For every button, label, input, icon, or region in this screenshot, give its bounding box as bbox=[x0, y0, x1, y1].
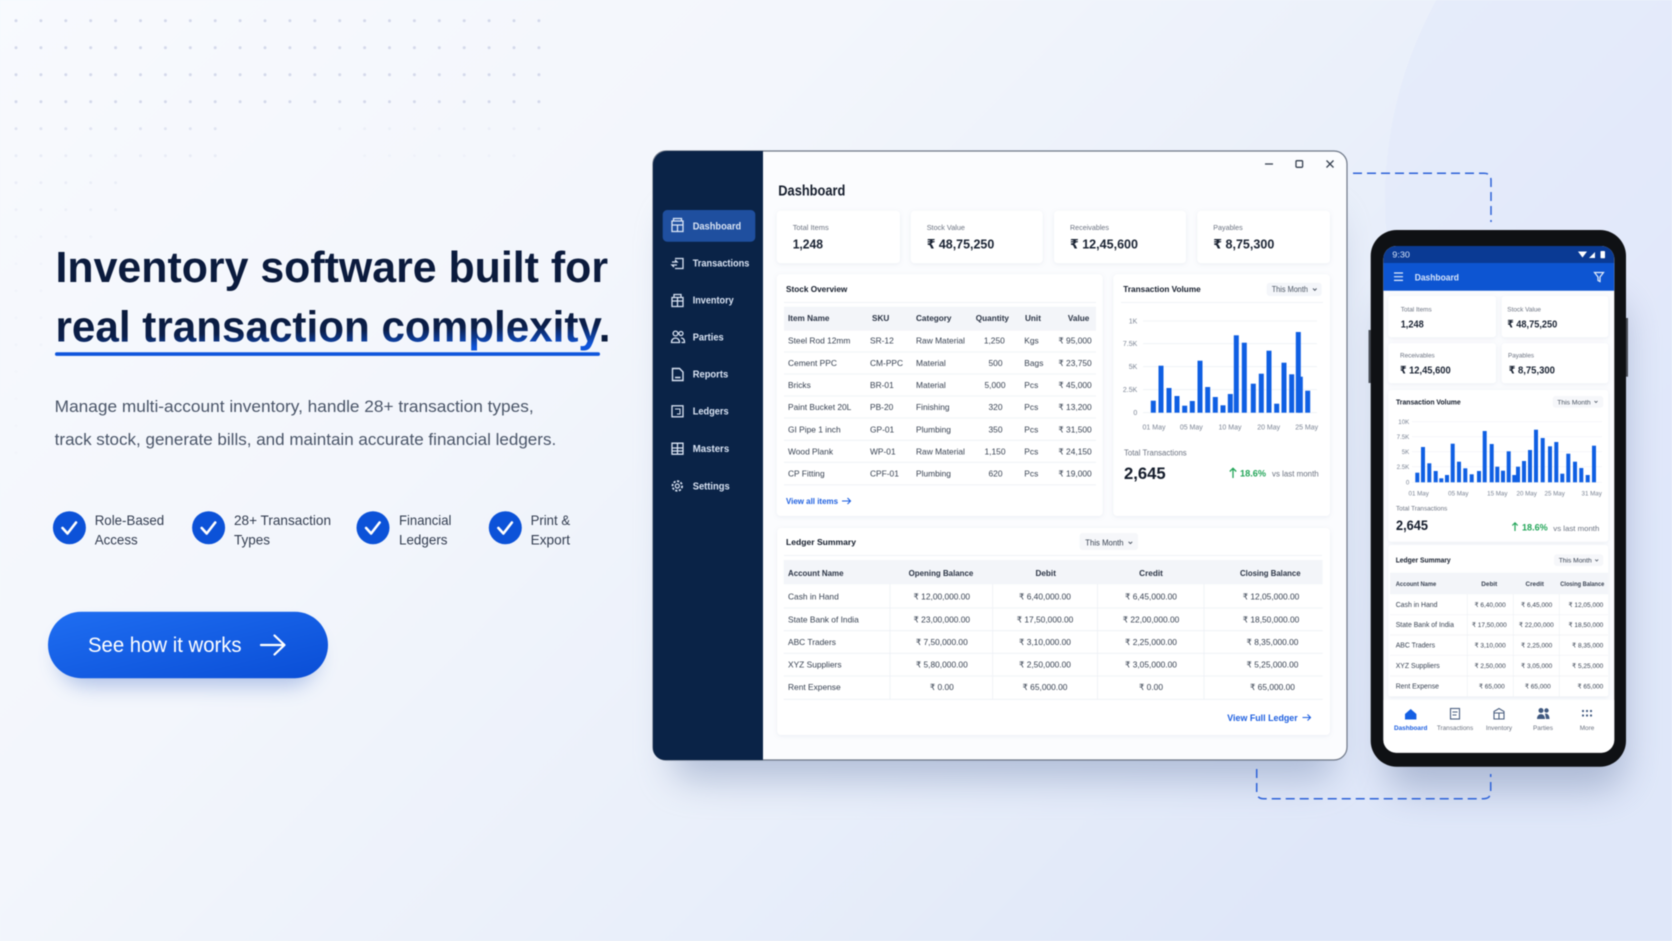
stock table: Pcs bbox=[1024, 446, 1038, 456]
phone ledger table bbox=[1390, 573, 1608, 697]
phone panel: ledger summary: Ledger Summary bbox=[1396, 556, 1451, 565]
dropdown: this month bbox=[1080, 533, 1138, 550]
bar chart: transaction volume: 10 May bbox=[1219, 424, 1242, 431]
stock table: Raw Material bbox=[916, 446, 965, 456]
stock table: Plumbing bbox=[916, 469, 951, 479]
phone ledger table: ₹ 2,25,000 bbox=[1521, 642, 1553, 650]
bar chart: transaction volume: 05 May bbox=[1180, 424, 1203, 431]
bar chart: transaction volume: 5K bbox=[1129, 364, 1138, 371]
phone ledger table: Debit bbox=[1481, 581, 1498, 588]
ledger table: ₹ 7,50,000.00 bbox=[916, 637, 968, 647]
ledger table: Opening Balance bbox=[909, 569, 974, 578]
tab: inventory: Inventory bbox=[1486, 725, 1513, 732]
stock table: ₹ 23,750 bbox=[1058, 358, 1092, 368]
phone status bar bbox=[1383, 246, 1614, 263]
description text: Manage multi-account inventory, handle 28+ transaction types, bbox=[55, 397, 534, 416]
bar chart: transaction volume: 1K bbox=[1129, 318, 1138, 326]
ledger table: ₹ 12,05,000.00 bbox=[1243, 592, 1300, 602]
stock table: ₹ 13,200 bbox=[1058, 402, 1092, 412]
nav item: reports bbox=[672, 368, 729, 381]
phone ledger table: ₹ 65,000 bbox=[1479, 684, 1505, 690]
stock table: 320 bbox=[989, 402, 1003, 412]
nav item: dashboard (active): Dashboard bbox=[693, 221, 741, 232]
bar chart: transaction volume: 0 bbox=[1133, 410, 1137, 417]
tab: transactions bbox=[1437, 708, 1473, 732]
heading: Inventory software built for bbox=[56, 243, 608, 292]
tab: inventory bbox=[1486, 708, 1513, 732]
stock table: ₹ 24,150 bbox=[1058, 446, 1092, 456]
stock table bbox=[784, 307, 1096, 485]
phone ledger table: ₹ 2,50,000 bbox=[1474, 663, 1506, 670]
phone ledger table: Rent Expense bbox=[1396, 684, 1439, 690]
bar chart: transaction volume: 20 May bbox=[1257, 424, 1281, 431]
nav item: settings bbox=[672, 481, 730, 492]
stock table: ₹ 19,000 bbox=[1058, 469, 1092, 479]
call to action button bbox=[48, 612, 328, 686]
phone total transactions stat bbox=[1396, 506, 1599, 533]
desktop window shadow bbox=[672, 215, 1334, 780]
tab: dashboard: Dashboard bbox=[1394, 725, 1427, 732]
stock table: Plumbing bbox=[916, 424, 951, 434]
phone kpi: payables: ₹ 8,75,300 bbox=[1509, 365, 1555, 377]
phone ledger table: State Bank of India bbox=[1396, 622, 1454, 629]
nav item: ledgers: Ledgers bbox=[693, 407, 729, 418]
dropdown: this month: This Month bbox=[1085, 538, 1124, 547]
stock table: Pcs bbox=[1024, 424, 1038, 434]
ledger table: ₹ 6,40,000.00 bbox=[1019, 592, 1071, 602]
window controls bbox=[1265, 160, 1334, 168]
feature list bbox=[53, 511, 571, 548]
phone ledger table: ₹ 65,000 bbox=[1525, 684, 1551, 690]
feature: print and export: Print & bbox=[531, 512, 571, 528]
phone kpi: stock value: ₹ 48,75,250 bbox=[1507, 318, 1557, 330]
ledger table: Rent Expense bbox=[788, 682, 841, 692]
panel: transaction volume bbox=[1113, 274, 1330, 516]
stock table: Pcs bbox=[1024, 380, 1038, 390]
feature: financial ledgers bbox=[356, 511, 451, 548]
phone total transactions stat: 18.6% bbox=[1522, 523, 1548, 533]
phone ledger table: Credit bbox=[1525, 581, 1545, 588]
stock table: Finishing bbox=[916, 402, 950, 412]
dashed connector: bottom bbox=[1257, 769, 1491, 799]
ledger table: ₹ 2,25,000.00 bbox=[1125, 637, 1177, 647]
nav item: transactions: Transactions bbox=[693, 258, 750, 269]
phone kpi: payables: Payables bbox=[1508, 353, 1535, 360]
phone ledger table: ₹ 17,50,000 bbox=[1472, 622, 1507, 629]
dropdown: this month: This Month bbox=[1272, 285, 1308, 294]
ledger table: State Bank of India bbox=[788, 614, 859, 624]
stock table: Unit bbox=[1025, 314, 1041, 323]
nav item: parties bbox=[672, 331, 724, 343]
ledger table: ₹ 5,25,000.00 bbox=[1247, 660, 1299, 670]
phone bar chart: 31 May bbox=[1582, 490, 1603, 497]
stock table: GP-01 bbox=[870, 424, 895, 434]
ledger table: ₹ 0.00 bbox=[1139, 682, 1163, 692]
stock table: Wood Plank bbox=[788, 446, 834, 456]
panel: transaction volume: Transaction Volume bbox=[1123, 284, 1201, 294]
total transactions stat bbox=[1124, 449, 1319, 483]
phone bar chart: 20 May bbox=[1517, 490, 1538, 497]
kpi: receivables: Receivables bbox=[1070, 223, 1109, 232]
kpi: stock value bbox=[911, 211, 1043, 263]
ledger table: ₹ 65,000.00 bbox=[1250, 682, 1295, 692]
phone kpi: total items: 1,248 bbox=[1401, 318, 1424, 330]
stock table: SR-12 bbox=[870, 336, 894, 346]
stock table: CPF-01 bbox=[870, 469, 899, 479]
ledger table: ₹ 3,10,000.00 bbox=[1019, 637, 1071, 647]
phone total transactions stat: 2,645 bbox=[1396, 518, 1428, 533]
phone bar chart: 10K bbox=[1398, 419, 1410, 426]
ledger table: XYZ Suppliers bbox=[788, 660, 842, 670]
ledger table: ₹ 8,35,000.00 bbox=[1247, 637, 1299, 647]
ledger table: Account Name bbox=[788, 569, 844, 578]
phone bar chart: 5K bbox=[1402, 449, 1410, 456]
bar chart: transaction volume: 2.5K bbox=[1123, 387, 1138, 394]
phone ledger table: Account Name bbox=[1396, 581, 1437, 588]
ledger table: ₹ 0.00 bbox=[930, 682, 954, 692]
nav item: settings: Settings bbox=[693, 481, 730, 492]
stock table: Paint Bucket 20L bbox=[788, 402, 852, 412]
feature: financial ledgers: Financial bbox=[399, 512, 451, 528]
phone bar chart: 7.5K bbox=[1397, 434, 1410, 441]
stock table: GI Pipe 1 inch bbox=[788, 424, 841, 434]
kpi: receivables bbox=[1054, 211, 1186, 263]
link: view full ledger: View Full Ledger bbox=[1227, 713, 1298, 724]
stock table: 500 bbox=[989, 358, 1003, 368]
stock table: 350 bbox=[989, 424, 1003, 434]
phone ledger table: ₹ 65,000 bbox=[1577, 684, 1604, 690]
stock table: CP Fitting bbox=[788, 469, 825, 479]
phone dropdown bbox=[1554, 397, 1602, 407]
stock table: Quantity bbox=[976, 314, 1009, 323]
stock table: 1,150 bbox=[985, 446, 1006, 456]
phone buttons bbox=[1368, 318, 1628, 383]
feature: transaction types: 28+ Transaction bbox=[234, 512, 331, 528]
panel: ledger summary bbox=[777, 528, 1330, 735]
stock table: SKU bbox=[872, 314, 889, 323]
phone panel: transaction volume bbox=[1396, 398, 1602, 533]
kpi: total items bbox=[777, 211, 900, 263]
phone dropdown: This Month bbox=[1559, 558, 1592, 565]
phone ledger table: Cash in Hand bbox=[1396, 602, 1438, 609]
link: view all items: View all items bbox=[786, 496, 838, 506]
heading bbox=[55, 243, 610, 356]
stock table: ₹ 45,000 bbox=[1058, 380, 1092, 390]
bar chart: transaction volume bbox=[1123, 318, 1319, 431]
stock table: Value bbox=[1068, 314, 1090, 323]
kpi: total items: Total Items bbox=[793, 223, 829, 232]
feature: print and export: Export bbox=[531, 532, 570, 548]
stock table: Pcs bbox=[1024, 402, 1038, 412]
kpi: total items: 1,248 bbox=[793, 236, 823, 251]
phone ledger table: Closing Balance bbox=[1560, 581, 1605, 588]
stock table: Cement PPC bbox=[788, 358, 837, 368]
phone kpi: stock value bbox=[1507, 306, 1558, 330]
ledger table: ABC Traders bbox=[788, 637, 836, 647]
phone ledger table: ₹ 6,40,000 bbox=[1474, 602, 1506, 609]
stock table: Material bbox=[916, 380, 946, 390]
ledger table: ₹ 5,80,000.00 bbox=[916, 660, 968, 670]
phone kpi: receivables bbox=[1400, 352, 1451, 376]
ledger table: Credit bbox=[1139, 569, 1163, 578]
ledger table: ₹ 2,50,000.00 bbox=[1019, 660, 1071, 670]
phone ledger table: ₹ 12,05,000 bbox=[1568, 602, 1604, 609]
description text: track stock, generate bills, and maintain accurate financial ledgers. bbox=[55, 430, 556, 449]
phone dropdown: This Month bbox=[1557, 399, 1591, 406]
nav item: inventory: Inventory bbox=[693, 295, 734, 306]
phone bar chart: 25 May bbox=[1545, 490, 1566, 497]
ledger table bbox=[784, 560, 1323, 699]
phone kpi: receivables: Receivables bbox=[1400, 353, 1435, 360]
phone bar chart: 05 May bbox=[1448, 490, 1469, 497]
phone total transactions stat: Total Transactions bbox=[1396, 506, 1448, 513]
nav item: ledgers bbox=[672, 406, 729, 418]
ledger table: ₹ 12,00,000.00 bbox=[914, 592, 970, 602]
phone bar chart bbox=[1397, 419, 1603, 497]
nav item: reports: Reports bbox=[693, 370, 729, 381]
feature: role-based access: Access bbox=[95, 532, 138, 548]
feature: transaction types bbox=[192, 511, 331, 548]
kpi: receivables: ₹ 12,45,600 bbox=[1070, 236, 1138, 251]
feature: transaction types: Types bbox=[234, 532, 270, 548]
page title: Dashboard bbox=[778, 184, 845, 200]
phone bar chart: 0 bbox=[1406, 480, 1410, 486]
call to action button: See how it works bbox=[88, 634, 242, 657]
ledger table: ₹ 3,05,000.00 bbox=[1125, 660, 1177, 670]
phone bar chart: 2.5K bbox=[1397, 464, 1410, 471]
description text bbox=[55, 397, 556, 449]
tab: more bbox=[1580, 710, 1595, 732]
panel: stock overview bbox=[777, 274, 1103, 516]
stock table: Item Name bbox=[788, 314, 830, 323]
phone app bar bbox=[1383, 263, 1614, 291]
heading: real transaction complexity. bbox=[56, 303, 610, 352]
ledger table: ₹ 23,00,000.00 bbox=[914, 614, 970, 624]
ledger table: ₹ 22,00,000.00 bbox=[1123, 614, 1180, 624]
kpi: payables bbox=[1197, 211, 1330, 263]
total transactions stat: 18.6% bbox=[1240, 469, 1267, 480]
stock table: Bags bbox=[1024, 358, 1043, 368]
stock table: Kgs bbox=[1024, 336, 1039, 346]
phone ledger table: ABC Traders bbox=[1396, 642, 1436, 650]
kpi: stock value: ₹ 48,75,250 bbox=[927, 236, 994, 251]
phone ledger table: ₹ 3,05,000 bbox=[1521, 663, 1553, 670]
stock table: 1,250 bbox=[984, 336, 1005, 346]
tab: dashboard bbox=[1394, 709, 1427, 732]
tab: parties: Parties bbox=[1533, 725, 1553, 732]
phone dropdown bbox=[1555, 555, 1602, 565]
feature: financial ledgers: Ledgers bbox=[399, 532, 448, 548]
phone total transactions stat: vs last month bbox=[1553, 524, 1599, 533]
ledger table: ₹ 18,50,000.00 bbox=[1243, 614, 1300, 624]
stock table: 5,000 bbox=[985, 380, 1006, 390]
phone kpi: stock value: Stock Value bbox=[1507, 306, 1541, 313]
phone ledger table: ₹ 18,50,000 bbox=[1568, 622, 1604, 629]
phone ledger table: XYZ Suppliers bbox=[1396, 663, 1440, 670]
nav item: parties: Parties bbox=[693, 332, 724, 343]
kpi: payables: Payables bbox=[1213, 223, 1243, 232]
dashed connector: top bbox=[1353, 173, 1491, 222]
phone shadow bbox=[1385, 300, 1625, 790]
ledger table: Cash in Hand bbox=[788, 592, 839, 602]
stock table: Raw Material bbox=[916, 336, 965, 346]
tab: transactions: Transactions bbox=[1437, 725, 1473, 732]
phone status bar: 9:30 bbox=[1392, 250, 1410, 260]
phone ledger table: ₹ 3,10,000 bbox=[1474, 642, 1506, 650]
phone ledger table: ₹ 8,35,000 bbox=[1572, 642, 1604, 650]
phone ledger table: ₹ 22,00,000 bbox=[1519, 622, 1554, 629]
stock table: Material bbox=[916, 358, 946, 368]
tab: more: More bbox=[1580, 725, 1595, 732]
stock table: Bricks bbox=[788, 380, 811, 390]
desktop window bbox=[653, 151, 1347, 760]
nav item: dashboard (active) bbox=[663, 210, 755, 242]
phone panel: ledger summary bbox=[1388, 545, 1608, 697]
stock table: Pcs bbox=[1024, 469, 1038, 479]
bar chart: transaction volume: 01 May bbox=[1143, 424, 1166, 431]
stock table: WP-01 bbox=[870, 446, 896, 456]
phone kpi: payables bbox=[1508, 352, 1556, 376]
nav item: masters: Masters bbox=[693, 444, 730, 455]
tab: parties bbox=[1533, 708, 1553, 732]
ledger table: Debit bbox=[1035, 569, 1056, 578]
phone bbox=[1368, 230, 1628, 767]
stock table: PB-20 bbox=[870, 402, 894, 412]
sidebar bbox=[653, 151, 763, 760]
ledger table: ₹ 6,45,000.00 bbox=[1125, 592, 1177, 602]
phone ledger table: ₹ 6,45,000 bbox=[1521, 602, 1553, 609]
feature: print and export bbox=[489, 511, 571, 548]
stock table: Steel Rod 12mm bbox=[788, 336, 850, 346]
stock table: CM-PPC bbox=[870, 358, 903, 368]
stock table: Category bbox=[916, 314, 952, 323]
ledger table: Closing Balance bbox=[1240, 569, 1301, 578]
panel: ledger summary: Ledger Summary bbox=[786, 537, 856, 547]
nav item: inventory bbox=[672, 294, 734, 306]
dropdown: this month bbox=[1267, 283, 1322, 296]
panel: stock overview: Stock Overview bbox=[786, 284, 848, 294]
phone bar chart: 15 May bbox=[1487, 490, 1508, 497]
phone kpi: receivables: ₹ 12,45,600 bbox=[1400, 365, 1451, 377]
feature: role-based access bbox=[53, 511, 164, 548]
ledger table: ₹ 17,50,000.00 bbox=[1017, 614, 1074, 624]
phone app bar: Dashboard bbox=[1415, 272, 1459, 283]
stock table: ₹ 95,000 bbox=[1058, 336, 1092, 346]
total transactions stat: vs last month bbox=[1272, 470, 1319, 479]
feature: role-based access: Role-Based bbox=[95, 512, 164, 528]
stock table: ₹ 31,500 bbox=[1058, 424, 1092, 434]
phone kpi: total items: Total Items bbox=[1401, 306, 1432, 313]
kpi: payables: ₹ 8,75,300 bbox=[1213, 236, 1274, 251]
ledger table: ₹ 65,000.00 bbox=[1023, 682, 1068, 692]
phone kpi: total items bbox=[1400, 306, 1432, 330]
phone bar chart: 01 May bbox=[1409, 490, 1430, 497]
nav item: masters bbox=[672, 443, 730, 455]
phone bottom navigation bbox=[1383, 700, 1614, 753]
bar chart: transaction volume: 7.5K bbox=[1123, 341, 1138, 348]
total transactions stat: Total Transactions bbox=[1124, 449, 1187, 458]
phone ledger table: ₹ 5,25,000 bbox=[1572, 663, 1604, 670]
phone panel: transaction volume: Transaction Volume bbox=[1396, 397, 1461, 406]
kpi: stock value: Stock Value bbox=[927, 223, 965, 232]
bar chart: transaction volume: 25 May bbox=[1295, 424, 1319, 431]
total transactions stat: 2,645 bbox=[1124, 464, 1166, 483]
stock table: 620 bbox=[989, 469, 1003, 479]
stock table: BR-01 bbox=[870, 380, 894, 390]
